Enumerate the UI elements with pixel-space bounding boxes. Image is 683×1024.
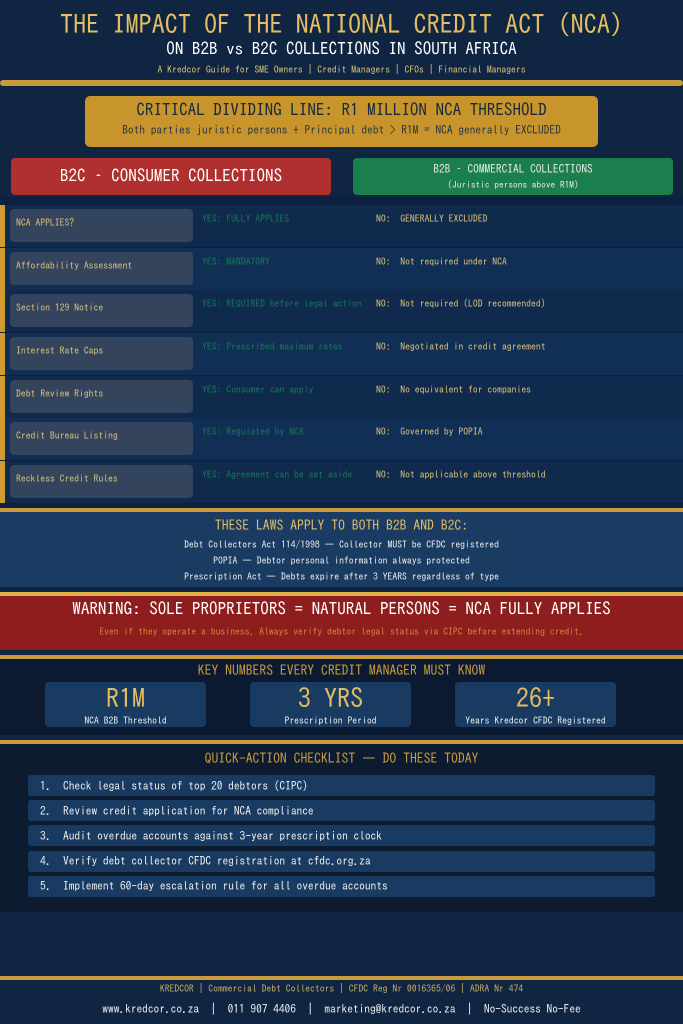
panel heading: B2C: B2C – CONSUMER COLLECTIONS bbox=[60, 168, 282, 185]
laws list: Debt Collectors Act 114/1998 — Collector MUST be CFDC registered bbox=[184, 540, 499, 550]
company credentials: KREDCOR | Commercial Debt Collectors | CFDC Reg Nr 0016365/06 | ADRA Nr 474 bbox=[160, 984, 523, 994]
panel heading: B2B bbox=[353, 158, 673, 195]
row: interest caps: NO: Negotiated in credit agreement bbox=[376, 342, 546, 352]
warning heading: WARNING: SOLE PROPRIETORS = NATURAL PERSONS = NCA FULLY APPLIES bbox=[72, 601, 611, 618]
item 4: 4. bbox=[40, 856, 51, 867]
stat: threshold bbox=[45, 682, 206, 727]
row: credit bureau bbox=[0, 418, 683, 460]
row: interest caps: Interest Rate Caps bbox=[16, 346, 103, 356]
panel: laws for both: Prescription Act — Debts expire after 3 YEARS regardless of type bbox=[184, 572, 499, 582]
warning detail: Even if they operate a business. Always verify debtor legal status via CIPC before extending credit. bbox=[99, 627, 584, 637]
panel: warning bbox=[0, 596, 683, 650]
item 5 bbox=[28, 876, 655, 897]
row: debt review: Debt Review Rights bbox=[16, 389, 103, 399]
callout heading: CRITICAL DIVIDING LINE: R1 MILLION NCA THRESHOLD bbox=[136, 102, 547, 119]
item 3: Audit overdue accounts against 3-year prescription clock bbox=[63, 831, 382, 842]
row: NCA applies: YES: FULLY APPLIES bbox=[202, 214, 289, 224]
stat: prescription: 3 YRS bbox=[298, 686, 363, 712]
audience tagline: A Kredcor Guide for SME Owners | Credit Managers | CFOs | Financial Managers bbox=[157, 65, 526, 75]
row: affordability: YES: MANDATORY bbox=[202, 257, 270, 267]
laws heading: THESE LAWS APPLY TO BOTH B2B AND B2C: bbox=[215, 518, 468, 532]
row: affordability: Affordability Assessment bbox=[16, 261, 132, 271]
subtitle: ON B2B vs B2C COLLECTIONS IN SOUTH AFRICA bbox=[166, 41, 517, 58]
checklist heading: QUICK-ACTION CHECKLIST — DO THESE TODAY bbox=[205, 751, 478, 765]
row: interest caps bbox=[0, 333, 683, 375]
stat: prescription: Prescription Period bbox=[284, 716, 377, 726]
panel heading: B2B: (Juristic persons above R1M) bbox=[447, 181, 579, 190]
row: section 129: Section 129 Notice bbox=[16, 303, 103, 313]
row: reckless credit bbox=[0, 461, 683, 503]
row: debt review: YES: Consumer can apply bbox=[202, 385, 313, 395]
row: reckless credit: YES: Agreement can be set aside bbox=[202, 470, 352, 480]
row: NCA applies bbox=[0, 205, 683, 247]
row: section 129: NO: Not required (LOD recommended) bbox=[376, 299, 546, 309]
row: NCA applies: NCA APPLIES? bbox=[16, 218, 74, 228]
item 2 bbox=[28, 800, 655, 821]
row: credit bureau: Credit Bureau Listing bbox=[16, 431, 118, 441]
row: interest caps: YES: Prescribed maximum rates bbox=[202, 342, 342, 352]
stat: prescription bbox=[250, 682, 411, 727]
item 3 bbox=[28, 825, 655, 846]
item 5: 5. bbox=[40, 881, 51, 892]
contact details: www.kredcor.co.za | 011 907 4406 | marketing@kredcor.co.za | No-Success No-Fee bbox=[102, 1004, 581, 1015]
callout detail: Both parties juristic persons + Principal debt > R1M = NCA generally EXCLUDED bbox=[122, 125, 561, 136]
panel: laws for both: POPIA — Debtor personal information always protected bbox=[213, 556, 470, 566]
item 2: Review credit application for NCA compliance bbox=[63, 806, 314, 817]
row: credit bureau: NO: Governed by POPIA bbox=[376, 427, 483, 437]
item 3: 3. bbox=[40, 831, 51, 842]
item 1 bbox=[28, 775, 655, 796]
item 4: Verify debt collector CFDC registration at cfdc.org.za bbox=[63, 856, 371, 867]
panel: laws for both bbox=[0, 512, 683, 587]
row: reckless credit: Reckless Credit Rules bbox=[16, 474, 118, 484]
stat: years registered: 26+ bbox=[516, 686, 555, 712]
footer bbox=[102, 983, 581, 1015]
panel: key numbers bbox=[0, 659, 683, 735]
panel heading: B2C bbox=[11, 158, 331, 195]
title: THE IMPACT OF THE NATIONAL CREDIT ACT (NCA) bbox=[60, 12, 623, 38]
row: credit bureau: YES: Regulated by NCA bbox=[202, 427, 304, 437]
comparison table bbox=[0, 197, 683, 508]
item 5: Implement 60-day escalation rule for all overdue accounts bbox=[63, 881, 388, 892]
row: affordability: NO: Not required under NCA bbox=[376, 257, 507, 267]
row: debt review: NO: No equivalent for companies bbox=[376, 385, 531, 395]
row: reckless credit: NO: Not applicable above threshold bbox=[376, 470, 546, 480]
item 2: 2. bbox=[40, 806, 51, 817]
stat: threshold: R1M bbox=[106, 686, 145, 712]
panel heading: B2B: B2B – COMMERCIAL COLLECTIONS bbox=[433, 164, 593, 175]
panel: checklist bbox=[0, 744, 683, 912]
item 4 bbox=[28, 851, 655, 872]
stat: years registered bbox=[455, 682, 616, 727]
stat: threshold: NCA B2B Threshold bbox=[84, 716, 167, 726]
item 1: Check legal status of top 20 debtors (CIPC) bbox=[63, 781, 308, 792]
key numbers heading: KEY NUMBERS EVERY CREDIT MANAGER MUST KNOW bbox=[198, 663, 485, 677]
callout: R1 million threshold bbox=[85, 96, 598, 147]
item 1: 1. bbox=[40, 781, 51, 792]
row: section 129 bbox=[0, 290, 683, 332]
row: section 129: YES: REQUIRED before legal action bbox=[202, 299, 362, 309]
row: affordability bbox=[0, 248, 683, 290]
header bbox=[60, 12, 623, 75]
stat: years registered: Years Kredcor CFDC Registered bbox=[465, 716, 606, 726]
row: NCA applies: NO: GENERALLY EXCLUDED bbox=[376, 214, 487, 224]
row: debt review bbox=[0, 376, 683, 418]
